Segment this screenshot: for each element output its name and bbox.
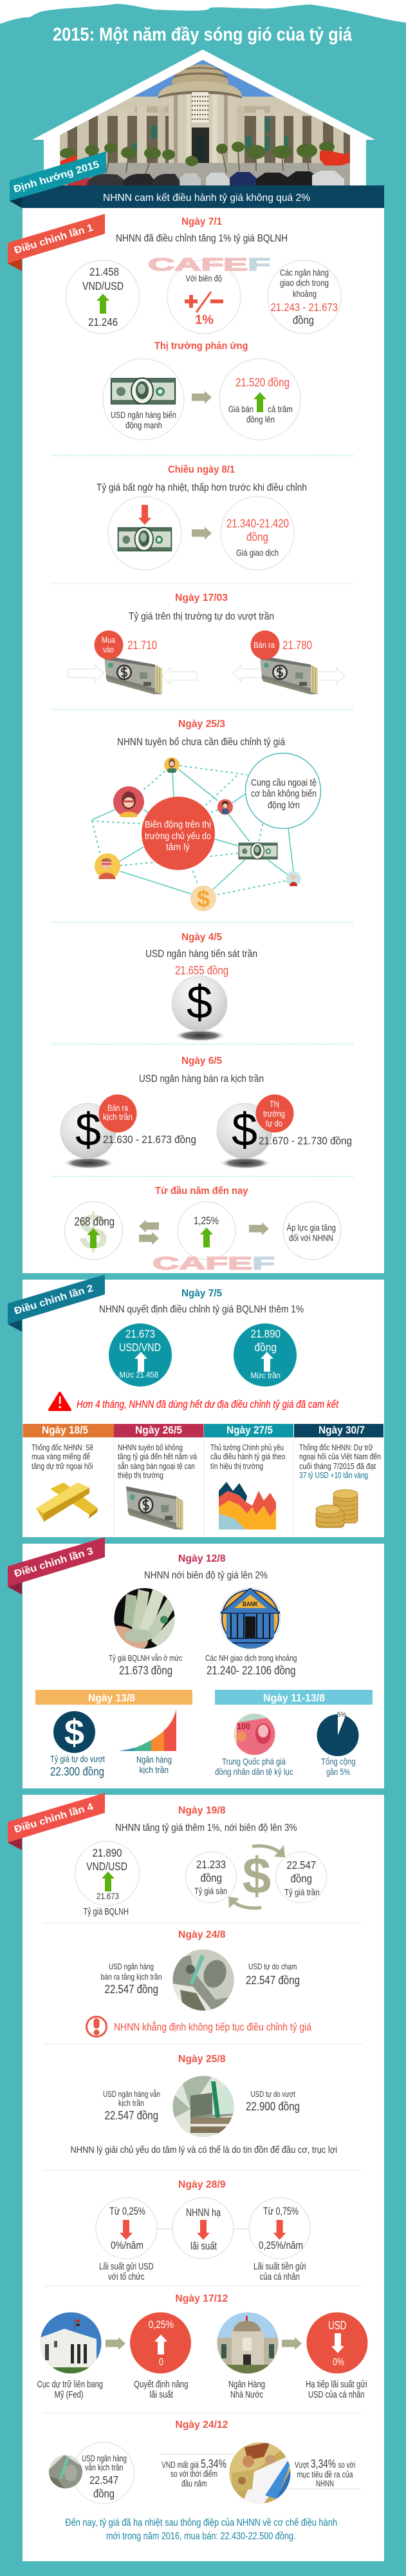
- block: Ngày 13/8: Ngày 13/8: [88, 1692, 135, 1704]
- coin: thị trường tự do: Thị: [270, 1099, 279, 1109]
- column: Ngày 26/5: [114, 1424, 203, 1530]
- icon: gold bars: [36, 1482, 98, 1522]
- circle: giao dịch trong khoảng: khoảng: [293, 289, 317, 299]
- caption: BQLNH: 21.673 đồng: [119, 1664, 172, 1677]
- caption: vượt 3,34%: so với: [338, 2460, 355, 2470]
- column: Ngày 18/5: Thống đốc NHNN: Sẽ: [32, 1443, 93, 1452]
- circle: cung cầu ngoại tệ: Cung cầu ngoại tệ: [251, 777, 317, 788]
- circle: tỷ giá trần: đồng: [291, 1872, 312, 1885]
- photo: Federal Reserve building: [40, 2312, 102, 2376]
- closing text: Đến nay, tỷ giá đã hạ nhiệt sau thông điệp của NHNN về cơ chế điều hành: [65, 2517, 337, 2528]
- heading: Ngày 6/5: Ngày 6/5: [181, 1056, 222, 1066]
- circle: 21.890 đồng: [234, 1323, 297, 1387]
- column: Ngày 26/5: tăng tỷ giá đến hết năm và: [118, 1452, 197, 1461]
- icon: warning triangle: [50, 1393, 70, 1410]
- ribbon: điều chỉnh lần 4: Điều chỉnh lần 4: [13, 1801, 95, 1835]
- ribbon: điều chỉnh lần 2: Điều chỉnh lần 2: [13, 1283, 95, 1317]
- coin: thị trường tự do: tự do: [266, 1118, 282, 1128]
- photo: VND banknotes: [229, 2442, 293, 2505]
- caption: VND mất giá: đầu năm: [181, 2479, 207, 2488]
- text: nới biên độ: NHNN nới biên độ tỷ giá lên 2%: [144, 1570, 268, 1581]
- caption: Fed: [37, 2380, 103, 2400]
- caption: ngân hàng kịch trần: Ngân hàng: [136, 1754, 172, 1765]
- column: Ngày 27/5: [204, 1424, 293, 1530]
- photo: bank icon: BANK: [243, 1601, 259, 1608]
- caption: ngân hàng kịch trần: kịch trần: [139, 1765, 169, 1775]
- text: kịch trần: USD ngân hàng bán ra kịch trần: [139, 1074, 264, 1084]
- avatar: small cyan: [286, 871, 301, 886]
- circle: 268 đồng: 268 đồng: [75, 1215, 115, 1228]
- circle: cung cầu ngoại tệ: cơ bản không biến: [251, 788, 317, 799]
- column: Ngày 30/7: Ngày 30/7: [318, 1424, 365, 1436]
- money stack: mua vào: Mua: [102, 635, 116, 645]
- text: thêm 1%: NHNN quyết định điều chỉnh tỷ giá BQLNH thêm 1%: [99, 1304, 304, 1315]
- circle: 0,25%: [130, 2312, 191, 2374]
- wings: [60, 116, 170, 164]
- caption: vượt 3,34%: NHNN: [316, 2479, 334, 2488]
- circle: tỷ giá sàn: [185, 1852, 237, 1903]
- coin: bán ra kịch trần: Bán ra: [107, 1103, 128, 1113]
- circle: USD vẫn kịch trần: 22.547: [89, 2474, 118, 2486]
- icon: money stack: [126, 1486, 183, 1530]
- circle: tỷ giá sàn: 21.233: [196, 1858, 226, 1871]
- caption: Fed: Cục dự trữ liên bang: [37, 2380, 103, 2390]
- circle: biến động tâm lý: Biến động trên thị: [145, 819, 211, 830]
- icon: silver dollar coin: [172, 976, 227, 1041]
- ribbon: điều chỉnh lần 2: [8, 1274, 105, 1332]
- caption: lãi suất gửi USD: Lãi suất gửi USD: [99, 2262, 154, 2272]
- column: Ngày 26/5: Ngày 26/5: [135, 1424, 182, 1436]
- coin: thị trường tự do: trường: [263, 1108, 285, 1119]
- arrow: [106, 2337, 125, 2350]
- house frame with central bank photo: [32, 50, 375, 185]
- circle: giá giao dịch: đồng: [246, 531, 268, 544]
- circle: 21.890 VND/USD: Tỷ giá BQLNH: [84, 1907, 129, 1917]
- caption: NH giao dịch: 21.240- 22.106 đồng: [207, 1664, 296, 1677]
- caption: tổng cộng: Tổng cộng: [321, 1756, 355, 1766]
- ribbon: điều chỉnh lần 3: Điều chỉnh lần 3: [13, 1546, 95, 1580]
- circle: USD vẫn kịch trần: [49, 2442, 134, 2504]
- photo: yuan banknotes: [234, 1713, 276, 1756]
- photo: dollar bundles: [172, 1949, 234, 2011]
- heading: Ngày 4/5: Ngày 4/5: [181, 932, 222, 943]
- circle: từ 0,75%: 0,25%/năm: [259, 2239, 303, 2251]
- caption: lãi suất tiền gửi: [254, 2262, 306, 2282]
- circle: USD ngân hàng biến động: [103, 359, 184, 440]
- circle: tỷ giá trần: [275, 1852, 327, 1903]
- circle: áp lực gia tăng: đối với NHNN: [289, 1233, 333, 1243]
- caption: BQLNH: Tỷ giá BQLNH vẫn ở mức: [109, 1653, 182, 1663]
- red flags: [320, 150, 349, 166]
- caption: BQLNH: [109, 1653, 182, 1677]
- circle: 21.890 đồng: đồng: [255, 1341, 277, 1354]
- circle: 0,25%: 0,25%: [149, 2318, 174, 2331]
- circle: tỷ giá trần: Tỷ giá trần: [284, 1887, 319, 1897]
- dome: [171, 64, 229, 84]
- chart: zigzag area: [219, 1482, 276, 1530]
- lattice window: [192, 92, 208, 122]
- icon: exclamation circle: [86, 2017, 107, 2036]
- avatar: red woman: [113, 786, 144, 817]
- circle: tỷ giá trần: 22.547: [287, 1859, 316, 1871]
- heading: Ngày 7/5: Ngày 7/5: [181, 1288, 222, 1299]
- icon: gold coins: [316, 1490, 358, 1528]
- caption: Ngân hàng Nhà nước: Ngân Hàng: [228, 2380, 265, 2390]
- warning text: Hơn 4 tháng, NHNN đã dùng hết dư địa điều chỉnh tỷ giá đã cam kết: [77, 1398, 339, 1410]
- caption: nâng lãi suất: lãi suất: [150, 2390, 173, 2400]
- column: Ngày 27/5: cầu điều hành tỷ giá theo: [210, 1452, 286, 1461]
- column: Ngày 27/5: Ngày 27/5: [226, 1424, 273, 1436]
- arrow: [282, 2337, 302, 2350]
- circle: biến động tâm lý: trường chủ yếu do: [145, 831, 211, 842]
- text: hạ nhiệt: Tỷ giá bất ngờ hạ nhiệt, thấp hơn trước khi điều chỉnh: [97, 482, 307, 493]
- circle: USD 0%: 0%: [333, 2356, 344, 2368]
- chart: 5% pie: 5%: [337, 1711, 346, 1719]
- circle: biên độ +/- 1%: [167, 260, 241, 334]
- heading: Ngày 24/8: Ngày 24/8: [178, 1929, 226, 1940]
- circle: tỷ giá sàn: đồng: [201, 1871, 222, 1884]
- text: khẳng định: NHNN khẳng định không tiếp tục điều chỉnh tỷ giá: [114, 2021, 311, 2033]
- heading: Từ đầu năm đến nay: Từ đầu năm đến nay: [155, 1186, 248, 1197]
- caption: USD tự do vượt: USD tự do vượt: [251, 2089, 295, 2099]
- circle: 21.890 VND/USD: 21.673: [97, 1891, 119, 1901]
- circle: 21.890 VND/USD: 21.890: [93, 1846, 122, 1859]
- circle: từ 0,25%: Từ 0,25%: [109, 2205, 145, 2217]
- column: Ngày 26/5: thiệp thị trường: [118, 1471, 163, 1480]
- arrow: [192, 391, 212, 404]
- photo: hand holding dollars: [115, 1588, 175, 1649]
- money stack: mua vào: vào: [103, 645, 114, 654]
- circle: USD vẫn kịch trần: đồng: [93, 2487, 115, 2500]
- heading: Ngày 28/9: Ngày 28/9: [178, 2179, 226, 2190]
- watermark: CAFEF: CAFE F: [148, 254, 270, 274]
- icon: dollar circle: $: [64, 1712, 84, 1752]
- circle: NHNN hạ lãi suất: lãi suất: [190, 2240, 217, 2252]
- caption: USD tự do vượt: [246, 2089, 300, 2113]
- caption: USD ngân hàng vẫn kịch trần: USD ngân hàng vẫn: [103, 2089, 160, 2099]
- caption: USD tự do vượt: 22.900 đồng: [246, 2100, 300, 2113]
- circle: 268 đồng: [64, 1202, 122, 1260]
- caption: Ngân hàng Nhà nước: [228, 2380, 265, 2400]
- photo: bank icon: [220, 1588, 281, 1649]
- circle: NHNN hạ lãi suất: NHNN hạ: [186, 2206, 221, 2219]
- dark banner fold: [10, 193, 22, 208]
- caption: nâng lãi suất: Quyết định nâng: [134, 2380, 188, 2390]
- circle: 21.673 USD/VND: USD/VND: [119, 1341, 161, 1354]
- caption: tỷ giá tự do: 22.300 đồng: [50, 1765, 104, 1778]
- heading: Ngày 12/8: Ngày 12/8: [178, 1553, 226, 1564]
- money stack: bán ra: Bán ra: [254, 640, 275, 650]
- circle: 1,25%: 1,25%: [194, 1215, 219, 1227]
- circle: USD 0%: [306, 2312, 368, 2374]
- circle: 21.520 đồng: Giá bán: [228, 404, 254, 414]
- caption: lãi suất tiền gửi: của cá nhân: [260, 2272, 300, 2282]
- arrow: [249, 1222, 269, 1235]
- icon: dollar circle: [53, 1711, 95, 1753]
- ground and palms: [60, 163, 350, 185]
- ribbon: điều chỉnh lần 1: Điều chỉnh lần 1: [13, 222, 95, 256]
- panel: điều chỉnh lần 4: [23, 1795, 384, 2561]
- circle: 268 đồng: $: [79, 1203, 107, 1260]
- circle: cung cầu ngoại tệ: động lớn: [268, 800, 300, 811]
- circle: USD ngân hàng biến động: USD ngân hàng biến: [111, 410, 176, 420]
- heading: Ngày 17/12: Ngày 17/12: [175, 2293, 228, 2304]
- photo: dollar stack fan: [172, 2076, 234, 2138]
- heading: Ngày 7/1: Ngày 7/1: [181, 216, 222, 227]
- heading: Ngày 24/12: Ngày 24/12: [175, 2420, 228, 2430]
- block: Ngày 13/8: [35, 1690, 192, 1778]
- photo: central bank building: [60, 60, 350, 185]
- circle: biến động tâm lý: [142, 797, 215, 870]
- text: chưa cần điều chỉnh: NHNN tuyên bố chưa cần điều chỉnh tỷ giá: [117, 737, 285, 748]
- circle: 1,25%: [178, 1202, 235, 1260]
- arrow: [192, 527, 212, 540]
- column: Ngày 27/5: tín hiệu thị trường: [210, 1462, 263, 1471]
- panel: điều chỉnh lần 2: [23, 1280, 384, 1537]
- avatar: yellow man: [95, 853, 120, 879]
- circle: 21.890 đồng: 21.890: [251, 1327, 281, 1340]
- circle: 0,25%: 0: [159, 2356, 163, 2368]
- caption: hạ lãi suất gửi USD: Hạ tiếp lãi suất gửi: [306, 2380, 367, 2390]
- ribbon: điều chỉnh lần 1: [8, 214, 105, 271]
- column: Ngày 18/5: tăng dự trữ ngoại hối: [32, 1462, 93, 1471]
- torn white top edge: [0, 0, 406, 24]
- caption: VND mất giá: VND mất giá: [161, 2460, 199, 2470]
- heading: Thị trường phản ứng: Thị trường phản ứng: [154, 341, 248, 352]
- circle: tỷ giá sàn: Tỷ giá sàn: [194, 1886, 227, 1896]
- heading: Chiều ngày 8/1: Chiều ngày 8/1: [168, 464, 235, 475]
- circle: áp lực gia tăng: Áp lực gia tăng: [287, 1222, 336, 1233]
- caption: USD ngân hàng vẫn kịch trần: kịch trần: [118, 2098, 144, 2108]
- coin: thị trường tự do: 21.670 - 21.730 đồng: [259, 1135, 352, 1147]
- caption: USD ngân hàng: [100, 1962, 162, 1996]
- circle: giao dịch trong khoảng: 21.243 - 21.673: [270, 301, 338, 314]
- block: Ngày 11-13/8: [215, 1690, 373, 1777]
- circle: giao dịch trong khoảng: đồng: [293, 314, 314, 327]
- column: Ngày 26/5: NHNN tuyên bố không: [118, 1443, 183, 1452]
- circle: NHNN hạ lãi suất: [172, 2197, 234, 2259]
- circle: giao dịch trong khoảng: [268, 260, 341, 334]
- heading: Ngày 17/03: Ngày 17/03: [175, 592, 228, 603]
- caption: USD tự do chạm: USD tự do chạm: [248, 1962, 297, 1971]
- avatar: top woman: [164, 757, 180, 773]
- caption: lãi suất gửi USD: [99, 2262, 154, 2282]
- caption: NH giao dịch: Các NH giao dịch trong khoảng: [205, 1653, 297, 1663]
- caption: vượt 3,34%: 3,34%: [311, 2458, 336, 2470]
- column: Ngày 18/5: [23, 1424, 114, 1522]
- caption: ngân hàng kịch trần: [136, 1754, 172, 1775]
- circle: USD ngân hàng biến động: động mạnh: [125, 420, 162, 430]
- banner: commitment: [22, 185, 384, 208]
- caption: lãi suất gửi USD: với tổ chức: [108, 2272, 144, 2282]
- banner: commitment: NHNN cam kết điều hành tỷ giá không quá 2%: [103, 193, 310, 204]
- money stack: bán ra: [233, 630, 345, 694]
- column: Ngày 27/5: Thủ tướng Chính phủ yêu: [210, 1443, 284, 1452]
- circle: từ 0,75%: [249, 2197, 310, 2259]
- icon: dollar coin: $: [197, 886, 210, 912]
- circle: USD 0%: USD: [328, 2319, 346, 2332]
- circle: 21.458 VND/USD: 21.458: [89, 265, 119, 278]
- heading: Ngày 25/3: Ngày 25/3: [178, 719, 225, 730]
- coin: bán ra kịch trần: 21.630 - 21.673 đồng: [103, 1133, 196, 1146]
- caption: VND mất giá: [161, 2458, 226, 2488]
- caption: vượt 3,34%: mục tiêu đề ra của: [297, 2470, 353, 2479]
- circle: từ 0,25%: [96, 2197, 157, 2259]
- circle: 21.458 VND/USD: 21.246: [88, 316, 118, 328]
- caption: Trung Quốc phá giá: Trung Quốc phá giá: [222, 1756, 286, 1766]
- text: sát trần: USD ngân hàng tiến sát trần: [145, 949, 257, 960]
- column: Ngày 26/5: sẵn sàng bán ngoại tệ can: [118, 1461, 195, 1471]
- circle: cung cầu ngoại tệ: [246, 753, 320, 828]
- text: lý giải: NHNN lý giải chủ yếu do tâm lý và có thể là do tin đồn để đầu cơ, trục lợi: [71, 2145, 337, 2155]
- caption: VND mất giá: so với thời điểm: [171, 2469, 217, 2479]
- column: Ngày 18/5: mua vàng miếng để: [32, 1452, 90, 1461]
- circle: banknote down: [108, 497, 181, 570]
- icon: silver dollar coin: $: [187, 977, 212, 1028]
- column: Ngày 30/7: Thống đốc NHNN: Dự trữ: [299, 1443, 373, 1452]
- caption: tổng cộng: [321, 1756, 355, 1777]
- caption: NH giao dịch: [205, 1653, 297, 1677]
- coin: thị trường tự do: $: [232, 1104, 257, 1156]
- caption: vượt 3,34%: Vượt: [295, 2460, 309, 2470]
- money stack: bán ra: 21.780: [282, 639, 312, 652]
- photo: yuan banknotes: 100: [237, 1721, 250, 1731]
- caption: VND mất giá: 5,34%: [201, 2458, 226, 2470]
- caption: USD ngân hàng: bán ra tăng kịch trần: [100, 1972, 162, 1982]
- caption: USD tự do chạm: 22.547 đồng: [246, 1974, 300, 1987]
- caption: tổng cộng: gần 5%: [326, 1766, 350, 1777]
- circle: 21.520 đồng: [219, 359, 300, 440]
- icon: dollar cycle: [228, 1845, 285, 1908]
- column: Ngày 30/7: 37 tỷ USD +10 tấn vàng: [299, 1471, 368, 1480]
- column: Ngày 30/7: ngoại hối của Việt Nam đến: [299, 1452, 381, 1461]
- circle: 21.890 đồng: Mức trần: [251, 1370, 281, 1380]
- caption: Trung Quốc phá giá: [215, 1756, 293, 1777]
- column: Ngày 30/7: cuối tháng 7/2015 đã đạt: [299, 1462, 376, 1471]
- central tower: [169, 93, 237, 167]
- door: [192, 128, 209, 165]
- chart: 5% pie: [317, 1711, 359, 1756]
- text: tăng 1%: NHNN đã điều chỉnh tăng 1% tỷ giá BQLNH: [116, 233, 288, 244]
- circle: giá giao dịch: [221, 497, 294, 570]
- ribbon: Định hướng 2015: Định hướng 2015: [12, 159, 101, 195]
- parked cars: [67, 171, 344, 185]
- caption: Trung Quốc phá giá: đồng nhân dân tệ kỷ lục: [215, 1766, 293, 1777]
- caption: USD ngân hàng vẫn kịch trần: 22.547 đồng: [104, 2109, 158, 2122]
- caption: USD ngân hàng: 22.547 đồng: [104, 1983, 158, 1996]
- chart: rising curve: [119, 1709, 176, 1751]
- caption: vượt 3,34%: [295, 2458, 355, 2488]
- photo: State Bank building: [217, 2312, 279, 2374]
- photo: small dollar bundle: [49, 2455, 82, 2488]
- panel: điều chỉnh lần 1: [23, 208, 384, 1273]
- heading: Ngày 19/8: Ngày 19/8: [178, 1805, 226, 1816]
- panel: điều chỉnh lần 3: [23, 1544, 384, 1788]
- caption: Ngân hàng Nhà nước: Nhà Nước: [230, 2390, 263, 2400]
- caption: hạ lãi suất gửi USD: USD của cá nhân: [308, 2390, 365, 2400]
- icon: dollar coin: [190, 886, 216, 912]
- caption: USD tự do chạm: [246, 1962, 300, 1987]
- circle: giá giao dịch: 21.340-21.420: [226, 517, 289, 530]
- caption: lãi suất tiền gửi: Lãi suất tiền gửi: [254, 2262, 306, 2272]
- column: Ngày 18/5: Ngày 18/5: [42, 1424, 88, 1436]
- value: 21.655 đồng: 21.655 đồng: [175, 964, 228, 977]
- caption: hạ lãi suất gửi USD: [306, 2380, 367, 2400]
- icon: banknote: [238, 842, 278, 860]
- circle: áp lực gia tăng: [283, 1202, 341, 1260]
- circle: từ 0,25%: 0%/năm: [111, 2239, 143, 2251]
- circle: biên độ +/- 1%: Với biên độ: [185, 273, 222, 283]
- coin: bán ra kịch trần: kịch trần: [103, 1112, 133, 1122]
- caption: tỷ giá tự do: Tỷ giá tự do vượt: [50, 1754, 105, 1764]
- icon: dollar cycle: $: [243, 1847, 271, 1904]
- circle: giao dịch trong khoảng: Các ngân hàng: [280, 267, 329, 278]
- circle: 21.520 đồng: cả trăm: [268, 404, 293, 414]
- coin: thị trường tự do: [217, 1095, 352, 1169]
- circle: 21.458 VND/USD: [66, 260, 139, 334]
- money stack: mua vào: [68, 630, 197, 694]
- circle: 21.458 VND/USD: VND/USD: [82, 279, 124, 292]
- column: Ngày 30/7: [294, 1424, 383, 1528]
- ribbon: Định hướng 2015: [10, 151, 106, 201]
- circle: USD vẫn kịch trần: USD ngân hàng: [82, 2454, 127, 2463]
- circle: giá giao dịch: Giá giao dịch: [236, 547, 279, 558]
- heading: Ngày 25/8: Ngày 25/8: [178, 2054, 226, 2065]
- ribbon: điều chỉnh lần 3: [8, 1537, 105, 1595]
- circle: USD vẫn kịch trần: vẫn kịch trần: [85, 2463, 124, 2472]
- circle: 21.890 VND/USD: VND/USD: [86, 1860, 127, 1873]
- coin: bán ra kịch trần: $: [75, 1104, 101, 1156]
- circle: từ 0,75%: Từ 0,75%: [263, 2205, 299, 2217]
- closing text: mới trong năm 2016, mua bán: 22.430-22.500 đồng.: [106, 2531, 296, 2542]
- arrows: double: [139, 1220, 159, 1245]
- money stack: mua vào: 21.710: [127, 639, 157, 652]
- circle: 21.673 USD/VND: Mức 21.458: [120, 1370, 158, 1379]
- caption: USD ngân hàng vẫn kịch trần: [103, 2089, 160, 2122]
- text: tăng thêm 1%: NHNN tăng tỷ giá thêm 1%, nới biên độ lên 3%: [115, 1823, 297, 1833]
- caption: nâng lãi suất: [134, 2380, 188, 2400]
- circle: 21.673 USD/VND: [109, 1323, 172, 1387]
- caption: Fed: Mỹ (Fed): [54, 2390, 84, 2400]
- ribbon: điều chỉnh lần 4: [8, 1793, 105, 1850]
- title: 2015: Một năm đầy sóng gió của tỷ giá: [53, 24, 353, 45]
- closing text: [65, 2517, 337, 2542]
- text: vượt trần: Tỷ giá trên thị trường tự do vượt trần: [129, 611, 274, 622]
- caption: USD ngân hàng: USD ngân hàng: [109, 1962, 154, 1971]
- caption: tỷ giá tự do: [50, 1754, 105, 1778]
- circle: giao dịch trong khoảng: giao dịch trong: [280, 278, 329, 288]
- circle: 21.890 VND/USD: [75, 1841, 139, 1917]
- circle: 21.520 đồng: 21.520 đồng: [235, 376, 290, 389]
- coin: bán ra kịch trần: [60, 1095, 196, 1169]
- block: Ngày 11-13/8: Ngày 11-13/8: [263, 1692, 325, 1704]
- circle: 21.673 USD/VND: 21.673: [125, 1327, 155, 1340]
- circle: 21.520 đồng: đồng lên: [246, 414, 275, 424]
- circle: biên độ +/- 1%: 1%: [195, 313, 214, 327]
- avatar: small red: [217, 799, 233, 815]
- network diagram: [92, 753, 320, 912]
- circle: biến động tâm lý: tâm lý: [166, 842, 190, 853]
- watermark: CAFEF: CAFE F: [152, 1253, 275, 1273]
